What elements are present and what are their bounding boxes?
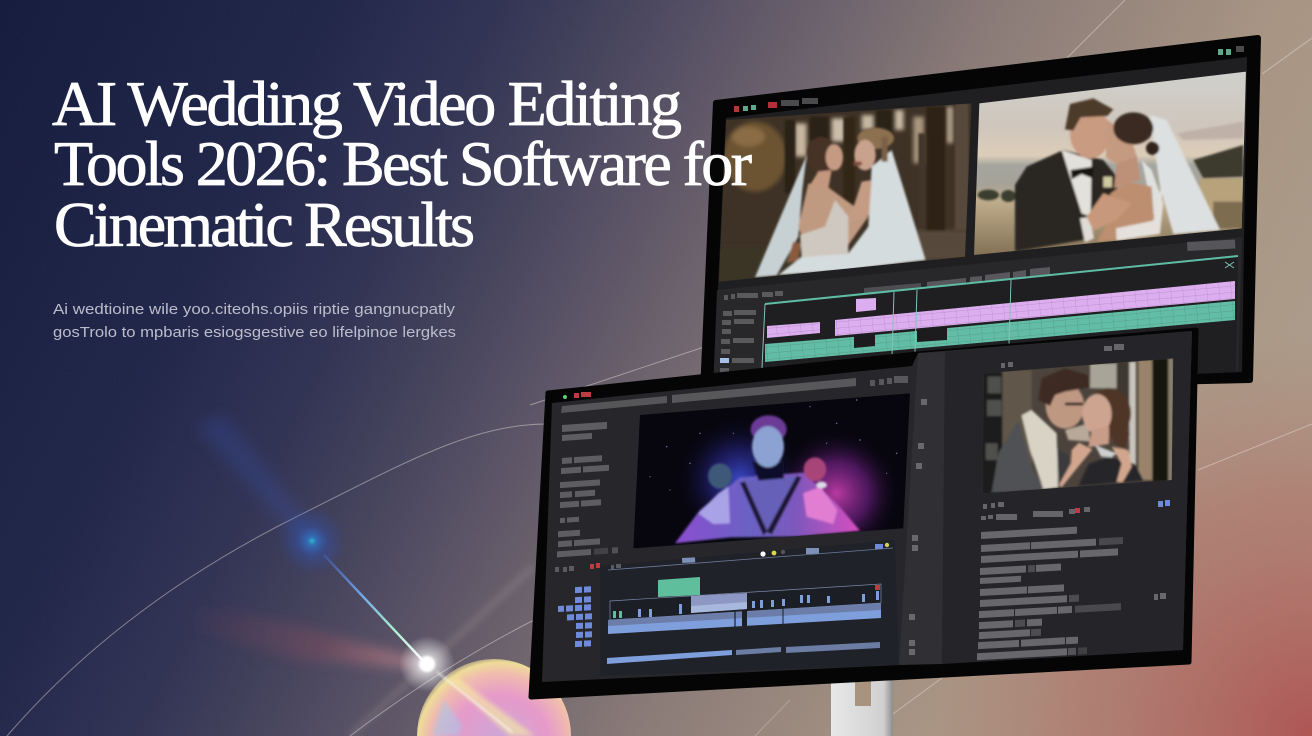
lower timeline panel	[600, 540, 899, 676]
back monitor	[703, 38, 1258, 392]
green clip	[658, 577, 700, 597]
green audio tracks	[765, 301, 1235, 362]
timeline playhead line	[765, 256, 1238, 304]
top bars	[561, 376, 908, 413]
side tool buttons	[909, 399, 1166, 655]
expand icon	[1225, 262, 1234, 268]
blue tracks	[608, 584, 881, 634]
left property list	[557, 421, 618, 557]
viewer: cosmic AI figure	[630, 390, 915, 555]
lower progress strips	[607, 642, 880, 664]
title: Tools 2026: Best Software for	[54, 128, 752, 199]
lens flare and prism bubble	[180, 415, 571, 736]
side tool column	[899, 352, 945, 665]
bezel	[703, 38, 1258, 392]
timeline controls row	[555, 543, 893, 572]
subtitle: Ai wedtioine wile yoo.citeohs.opiis riptie gangnucpatly	[53, 301, 456, 318]
title: Cinematic Results	[54, 189, 475, 260]
right inspector panel	[942, 331, 1192, 664]
subtitle	[53, 301, 456, 341]
timeline cursors	[762, 280, 1011, 368]
viewer: portrait of couple	[982, 358, 1174, 494]
timeline panel	[713, 237, 1242, 392]
bezel	[531, 330, 1196, 697]
screen panel	[713, 57, 1247, 392]
monitor stand	[831, 680, 893, 736]
screen panel	[542, 331, 1192, 682]
title: AI Wedding Video Editing	[52, 68, 682, 139]
inspector text lines	[977, 524, 1123, 660]
subtitle: gosTrolo to mpbaris esiogsgestive eo lifelpinoe lergkes	[53, 324, 456, 341]
inspector top controls	[981, 344, 1170, 520]
photo: groom and bride at sunset	[970, 70, 1250, 260]
blue key grid	[558, 586, 592, 648]
window controls	[734, 46, 1244, 112]
front monitor	[531, 330, 1196, 697]
photo: bridal couple in forest	[715, 100, 975, 285]
title	[52, 68, 752, 260]
pink video tracks	[767, 281, 1235, 338]
